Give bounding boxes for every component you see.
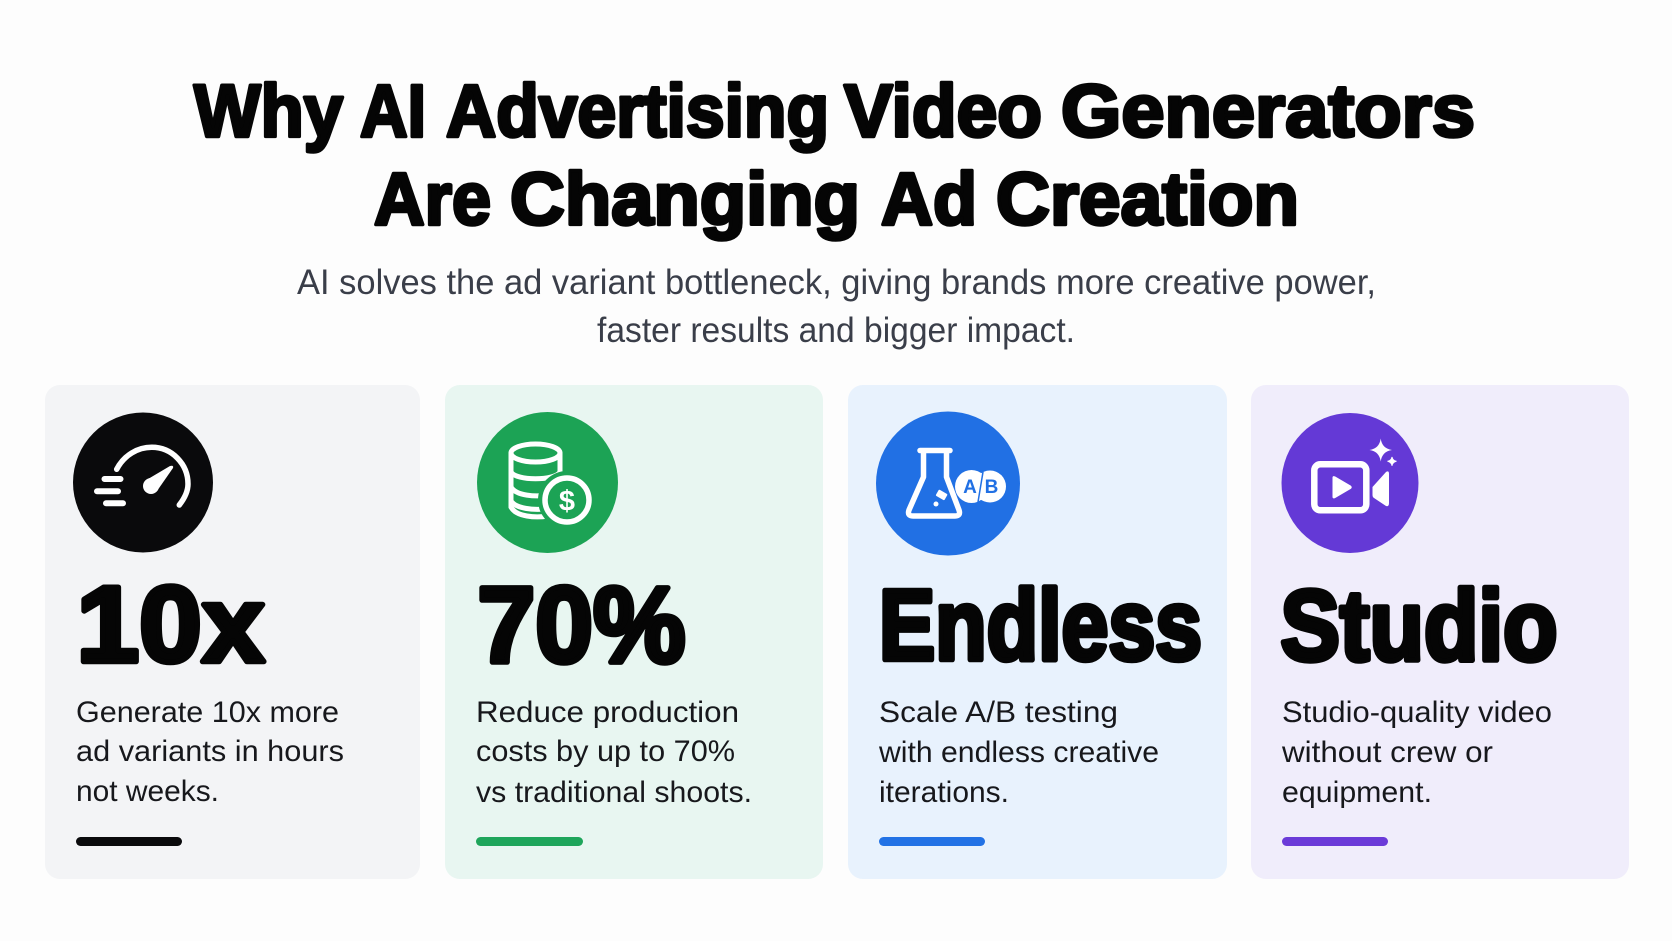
description: not weeks. <box>76 775 219 808</box>
title <box>194 70 1475 240</box>
stat: 70%: 70% <box>478 564 686 685</box>
stat: Endless: Endless <box>879 570 1202 682</box>
accent bar <box>879 837 985 846</box>
icon: speedometer <box>73 412 213 552</box>
panel: 70% cost <box>445 385 823 879</box>
description: equipment. <box>1282 776 1432 809</box>
title: Video <box>844 70 1042 152</box>
subtitle <box>297 263 1376 350</box>
description: with endless creative <box>878 736 1159 769</box>
panel: 10x speed <box>45 385 420 879</box>
icon: coins <box>477 412 618 553</box>
icon: flask with A/B <box>876 412 1020 556</box>
title: Are <box>374 158 491 240</box>
title: AI <box>360 70 426 152</box>
description <box>1281 696 1552 809</box>
title: Creation <box>996 158 1299 240</box>
title: Changing <box>510 158 860 240</box>
title: Generators <box>1061 70 1475 152</box>
panel: endless A/B testing <box>848 385 1227 879</box>
description: Reduce production <box>476 696 739 729</box>
stat: 10x: 10x <box>76 564 264 684</box>
description: Scale A/B testing <box>879 696 1118 729</box>
accent bar <box>476 837 583 846</box>
icon: coins: $ <box>559 486 575 518</box>
accent bar <box>76 837 182 846</box>
subtitle: faster results and bigger impact. <box>597 311 1075 350</box>
title: Advertising <box>446 70 829 152</box>
accent bar <box>1282 837 1388 846</box>
description <box>76 696 344 808</box>
description <box>878 696 1159 809</box>
icon: flask with A/B: A <box>963 477 977 498</box>
icon: video camera with sparkles <box>1282 413 1418 553</box>
description: without crew or <box>1281 736 1493 769</box>
description: Generate 10x more <box>76 696 339 729</box>
description: vs traditional shoots. <box>476 776 752 809</box>
title: Why <box>194 70 343 152</box>
description: ad variants in hours <box>76 735 344 768</box>
stat: Studio: Studio <box>1280 570 1558 682</box>
panel: studio quality <box>1251 385 1629 879</box>
subtitle: AI solves the ad variant bottleneck, giving brands more creative power, <box>297 263 1376 302</box>
description <box>476 696 752 809</box>
description: Studio-quality video <box>1282 696 1552 729</box>
icon: flask with A/B: B <box>985 477 998 498</box>
title: Ad <box>881 158 977 240</box>
description: costs by up to 70% <box>476 735 735 768</box>
description: iterations. <box>879 776 1009 809</box>
